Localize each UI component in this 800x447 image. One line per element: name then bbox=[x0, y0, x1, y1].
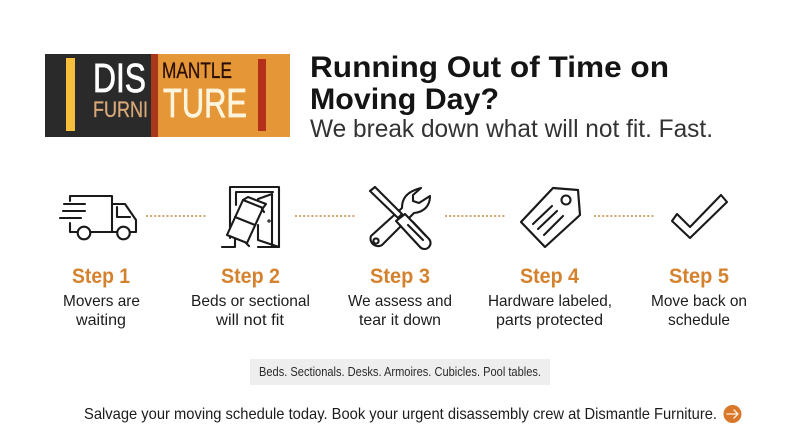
logo: Dismantle Furniture bbox=[45, 54, 290, 137]
title bbox=[310, 51, 669, 116]
step 2: will not fit bbox=[215, 312, 285, 329]
step 2 bbox=[191, 265, 310, 329]
logo: Dismantle Furniture: MANTLE bbox=[162, 58, 232, 83]
step 5: Step 5 bbox=[669, 265, 729, 288]
furniture types tag: Beds. Sectionals. Desks. Armoires. Cubicles. Pool tables. bbox=[259, 365, 541, 379]
step 5: Move back on bbox=[651, 293, 747, 310]
step 2: Beds or sectional bbox=[191, 293, 310, 310]
connector dots 3 bbox=[445, 215, 505, 217]
step 5 bbox=[651, 265, 747, 329]
logo: Dismantle Furniture: TURE bbox=[163, 80, 247, 126]
connector dots 1 bbox=[146, 215, 207, 217]
step 3: tear it down bbox=[359, 312, 441, 329]
icon: arrow button bbox=[724, 405, 742, 423]
furniture types tag bbox=[250, 359, 550, 385]
icon: crossed screwdriver and wrench bbox=[370, 187, 431, 249]
step 5: schedule bbox=[668, 312, 730, 329]
step 4: Step 4 bbox=[520, 265, 579, 288]
icon: sofa stuck in door bbox=[222, 187, 279, 247]
subtitle: We break down what will not fit. Fast. bbox=[310, 115, 713, 143]
step 1: waiting bbox=[75, 312, 126, 329]
step 3 bbox=[348, 265, 452, 329]
step 2: Step 2 bbox=[221, 265, 280, 288]
logo: Dismantle Furniture: DIS bbox=[93, 55, 146, 101]
step 3: Step 3 bbox=[370, 265, 430, 288]
step 4: parts protected bbox=[496, 312, 603, 329]
title: Moving Day? bbox=[310, 83, 499, 116]
connector dots 4 bbox=[594, 215, 655, 217]
icon: tag bbox=[521, 188, 580, 247]
step 1: Step 1 bbox=[72, 265, 130, 288]
call to action: Salvage your moving schedule today. Book your urgent disassembly crew at Dismantle Furniture. bbox=[84, 406, 717, 423]
step 1 bbox=[63, 265, 140, 329]
title: Running Out of Time on bbox=[310, 51, 669, 84]
step 3: We assess and bbox=[348, 293, 452, 310]
icon: moving truck bbox=[60, 196, 136, 239]
step 4: Hardware labeled, bbox=[488, 293, 612, 310]
step 4 bbox=[488, 265, 612, 329]
icon: check mark bbox=[672, 195, 727, 238]
connector dots 2 bbox=[295, 215, 356, 217]
logo: Dismantle Furniture: FURNI bbox=[93, 97, 148, 122]
step 1: Movers are bbox=[63, 293, 140, 310]
